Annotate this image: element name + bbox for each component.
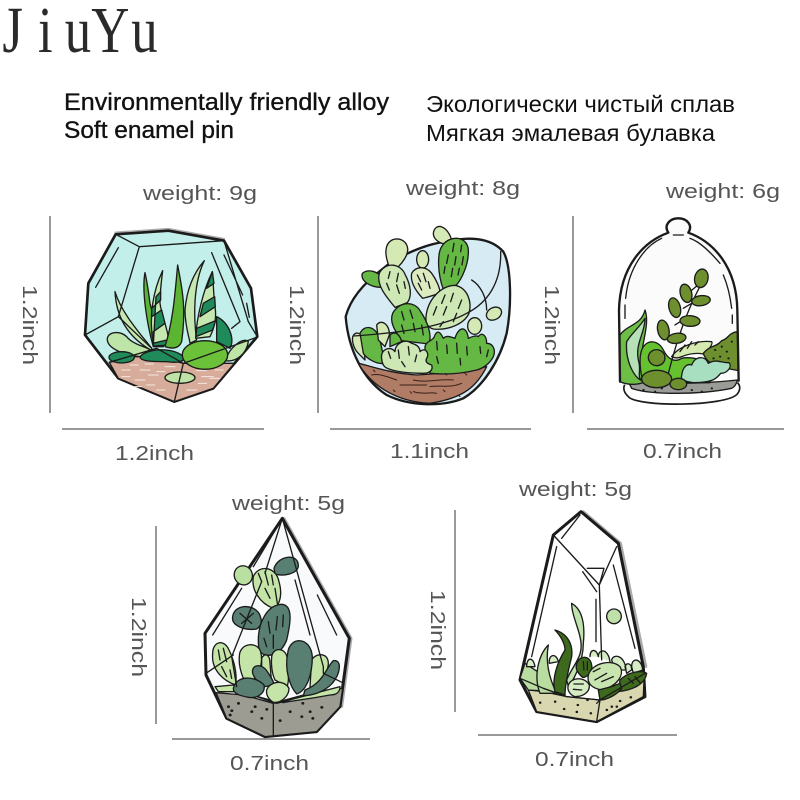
panel: pin 3 glass dome terrarium with dimensions xyxy=(540,181,784,463)
width dimension: 0.7inch xyxy=(643,441,722,463)
text block: Russian description: Мягкая эмалевая булавка xyxy=(426,120,715,146)
icon: cactus terrarium pin xyxy=(346,226,510,404)
weight label: weight: 6g xyxy=(665,181,780,203)
panel: pin 2 cactus terrarium with dimensions xyxy=(285,178,531,463)
width dimension: 1.1inch xyxy=(390,441,469,463)
weight label: weight: 5g xyxy=(231,493,345,515)
height dimension: 1.2inch xyxy=(18,285,40,365)
width dimension: 0.7inch xyxy=(535,749,614,771)
icon: aloe terrarium pin xyxy=(85,229,257,402)
height dimension: 1.2inch xyxy=(127,597,149,677)
height dimension: 1.2inch xyxy=(285,285,307,365)
width dimension: 1.2inch xyxy=(115,443,194,465)
text block: Russian description: Экологически чистый сплав xyxy=(426,91,735,117)
height dimension: 1.2inch xyxy=(426,590,448,670)
weight label: weight: 9g xyxy=(142,183,257,205)
icon: dome terrarium pin xyxy=(619,218,740,404)
width dimension: 0.7inch xyxy=(230,753,309,775)
text block: English description: Environmentally friendly alloy xyxy=(64,89,389,116)
panel: pin 5 crystal terrarium with dimensions xyxy=(426,479,677,771)
height dimension: 1.2inch xyxy=(540,285,562,365)
weight label: weight: 8g xyxy=(405,178,520,200)
panel: pin 1 geometric terrarium with dimensions xyxy=(18,183,264,465)
icon: teardrop terrarium pin xyxy=(205,518,351,737)
icon: crystal terrarium pin xyxy=(520,512,647,722)
text block: English description xyxy=(64,89,389,144)
weight label: weight: 5g xyxy=(518,479,632,501)
text block: Russian description xyxy=(426,91,735,146)
text block: English description: Soft enamel pin xyxy=(64,117,234,144)
panel: pin 4 teardrop terrarium with dimensions xyxy=(127,493,370,775)
